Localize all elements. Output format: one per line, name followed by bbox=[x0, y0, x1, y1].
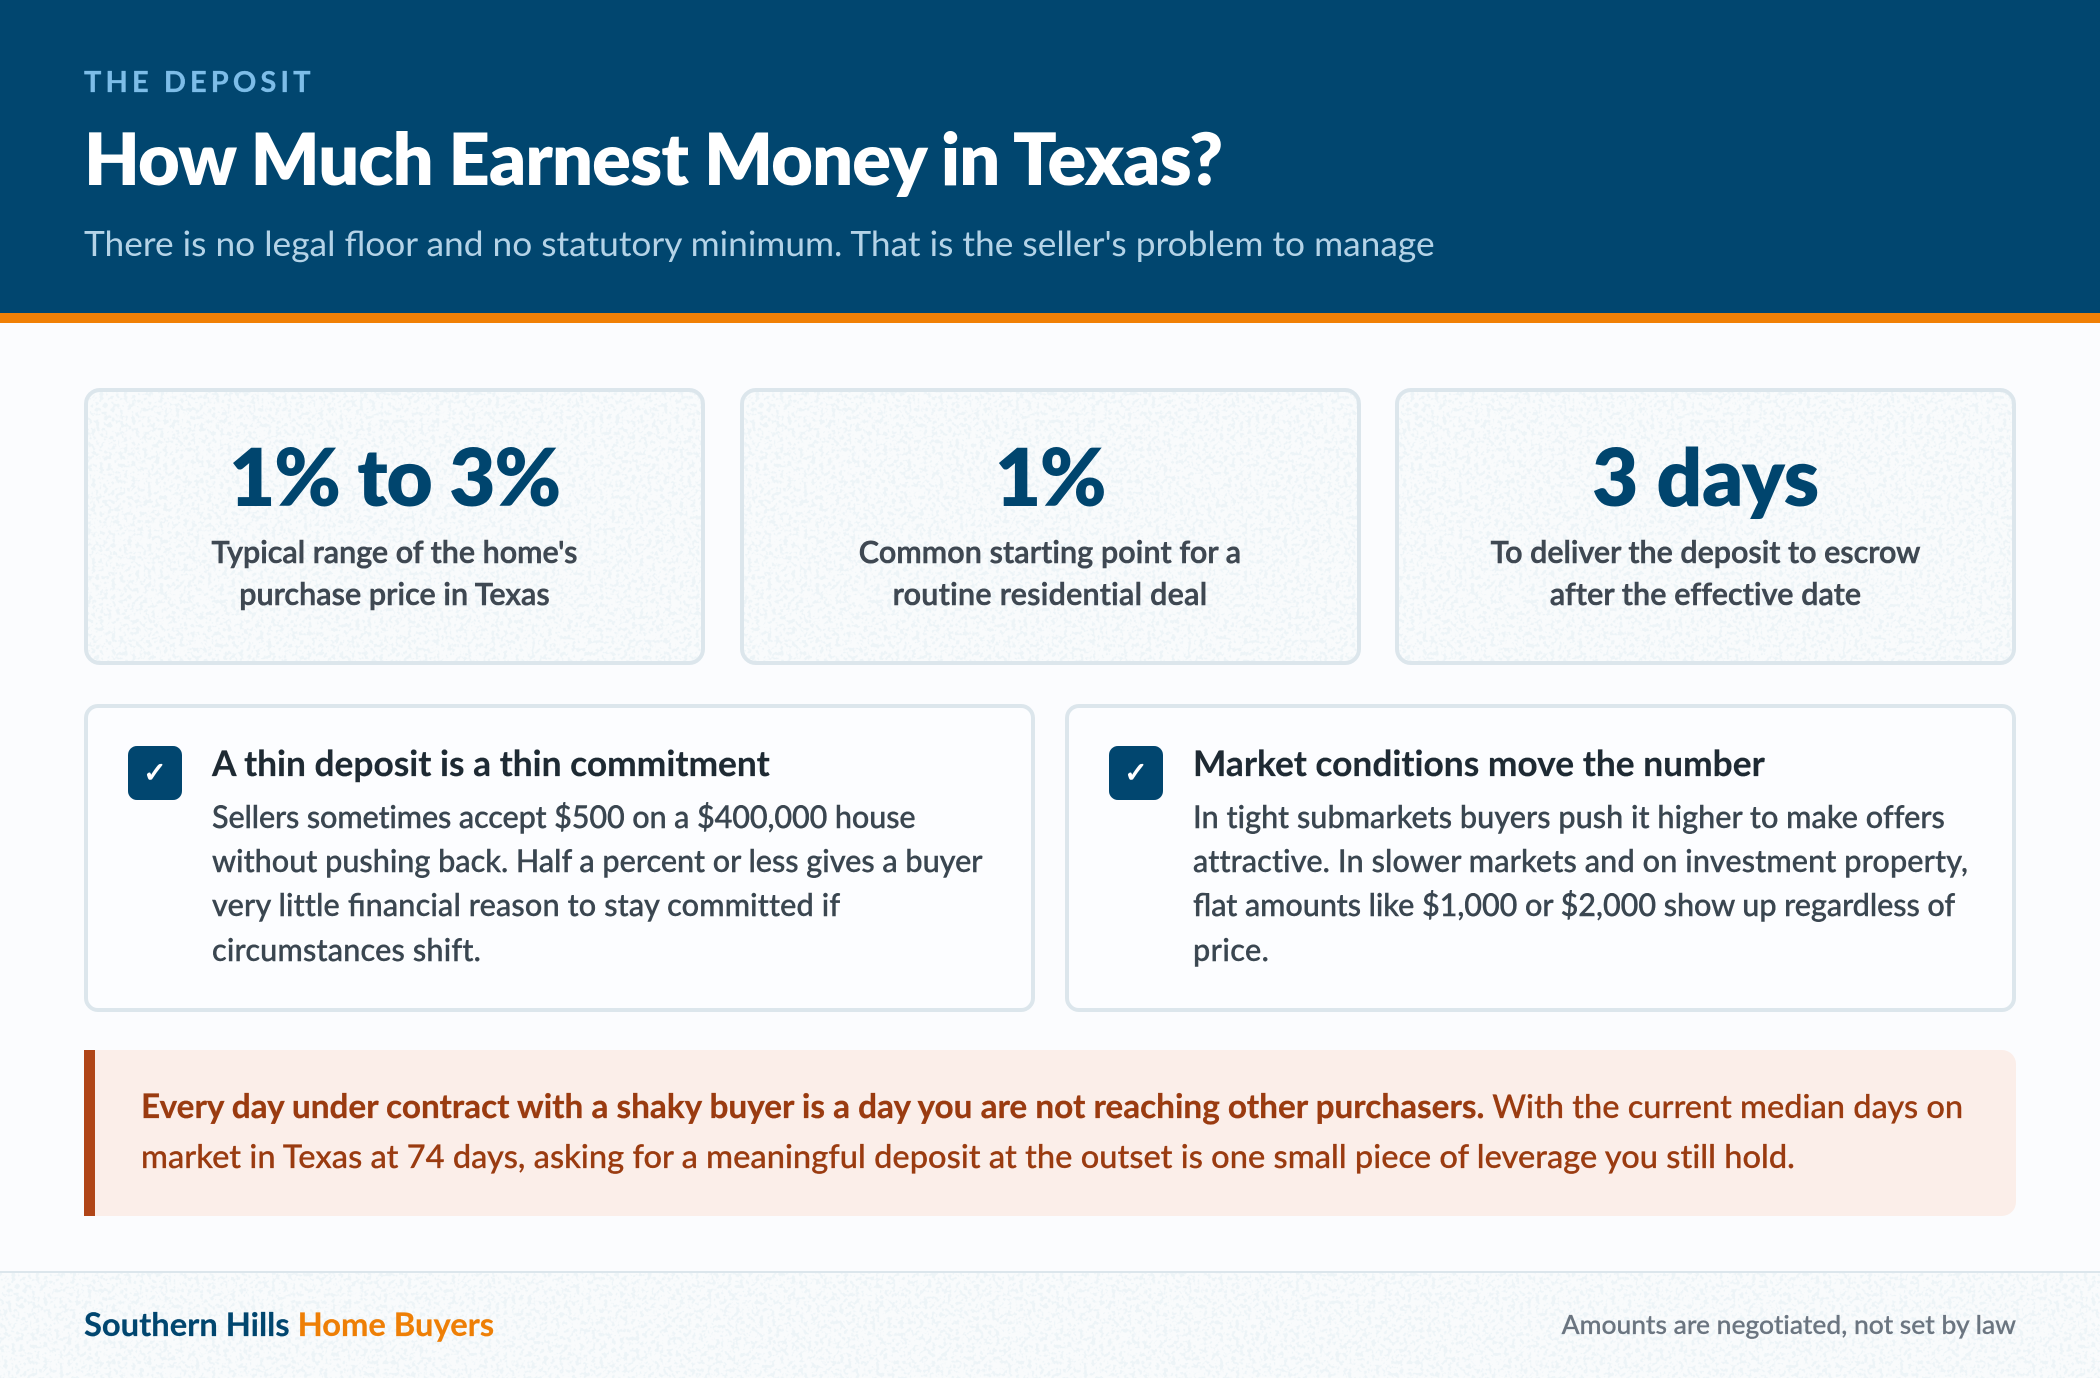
title: How Much Earnest Money in Texas? bbox=[84, 115, 1222, 201]
panel body: price. bbox=[1193, 931, 1269, 968]
header band bbox=[0, 0, 2100, 323]
panel body: without pushing back. Half a percent or less gives a buyer bbox=[212, 842, 983, 879]
panel heading: A thin deposit is a thin commitment bbox=[212, 741, 770, 784]
stat label bbox=[859, 534, 1241, 612]
panel body: Sellers sometimes accept $500 on a $400,000 house bbox=[212, 798, 915, 835]
stat label: To deliver the deposit to escrow bbox=[1491, 534, 1920, 570]
stat label: Typical range of the home's bbox=[212, 534, 577, 570]
panel body: attractive. In slower markets and on investment property, bbox=[1193, 842, 1968, 879]
stat label: Common starting point for a bbox=[859, 534, 1241, 570]
stat card: 3 days bbox=[1395, 388, 2016, 665]
footer note: Amounts are negotiated, not set by law bbox=[1562, 1308, 2016, 1340]
callout text: market in Texas at 74 days, asking for a meaningful deposit at the outset is one small piece of leverage you still hold. bbox=[141, 1136, 1795, 1175]
stat label bbox=[1490, 534, 1920, 612]
stat label bbox=[212, 534, 577, 612]
callout text bbox=[141, 1086, 1963, 1175]
panel body bbox=[212, 798, 983, 968]
icon: check: ✓ bbox=[143, 756, 167, 789]
subtitle: There is no legal floor and no statutory minimum. That is the seller's problem to manage bbox=[84, 221, 1435, 264]
stat value: 1% bbox=[995, 428, 1105, 524]
footer brand: Southern Hills Home Buyers bbox=[84, 1304, 494, 1343]
stat value: 1% to 3% bbox=[229, 428, 560, 524]
eyebrow: THE DEPOSIT bbox=[84, 64, 315, 99]
icon: check bbox=[1109, 746, 1163, 800]
callout bbox=[84, 1050, 2016, 1216]
stat value: 3 days bbox=[1592, 428, 1819, 524]
stat label: after the effective date bbox=[1550, 576, 1861, 612]
panel body: very little financial reason to stay committed if bbox=[212, 886, 840, 923]
stat label: routine residential deal bbox=[893, 576, 1207, 612]
panel: thin deposit bbox=[84, 704, 1035, 1012]
callout text: Every day under contract with a shaky buyer is a day you are not reaching other purchasers. With the current median days on bbox=[141, 1086, 1963, 1126]
panel body: flat amounts like $1,000 or $2,000 show up regardless of bbox=[1193, 886, 1955, 923]
panel body: In tight submarkets buyers push it higher to make offers bbox=[1193, 798, 1945, 835]
panel: market conditions bbox=[1065, 704, 2016, 1012]
stat card: 1% bbox=[740, 388, 1360, 665]
panel body: circumstances shift. bbox=[212, 931, 481, 968]
panel heading: Market conditions move the number bbox=[1193, 741, 1765, 784]
icon: check: ✓ bbox=[1124, 756, 1148, 789]
stat label: purchase price in Texas bbox=[239, 576, 550, 612]
footer bbox=[0, 1271, 2100, 1378]
stat card: 1% to 3% bbox=[84, 388, 705, 665]
panel body bbox=[1193, 798, 1968, 968]
icon: check bbox=[128, 746, 182, 800]
